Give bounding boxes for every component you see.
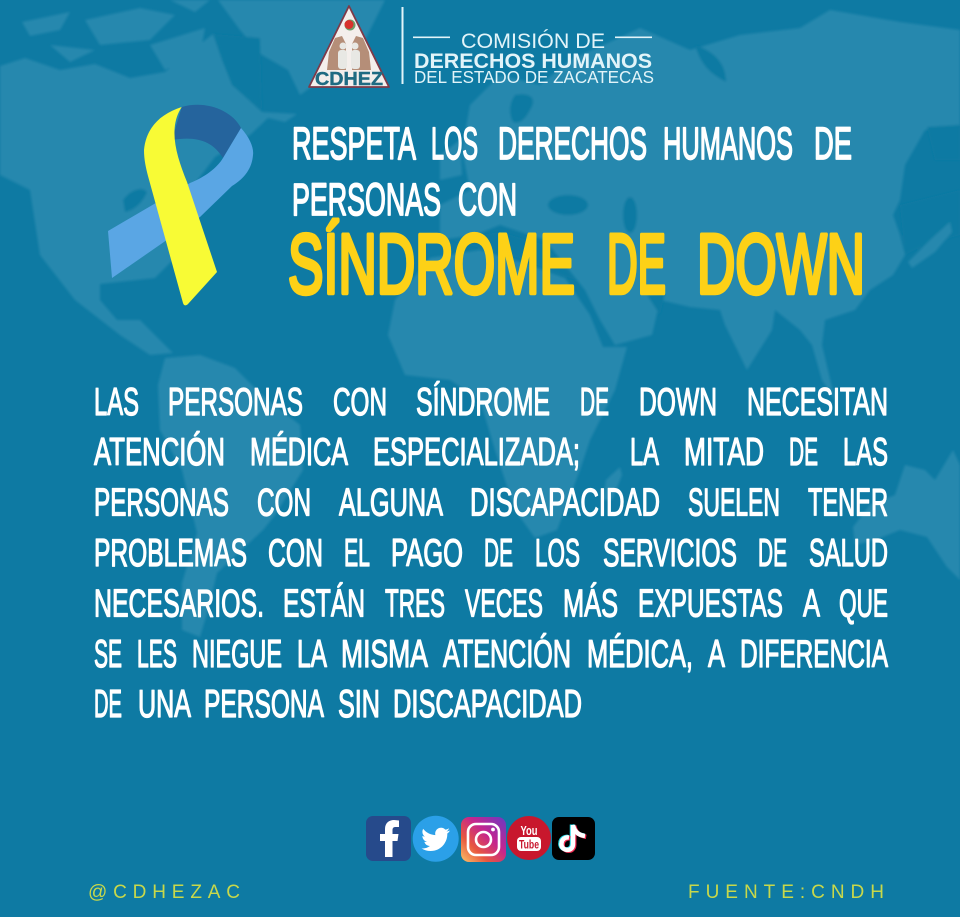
body text: NECESARIOS. — [94, 582, 264, 626]
heading line 1: DE — [814, 118, 852, 169]
body text: DE — [789, 431, 818, 474]
body text: DE — [94, 683, 122, 726]
body text: PERSONA — [204, 683, 324, 726]
body text: QUE — [839, 582, 888, 626]
body text: NECESITAN — [747, 381, 888, 424]
heading line 1: DERECHOS — [498, 118, 647, 169]
icon: instagram — [461, 817, 506, 862]
body text: MÉDICA — [250, 431, 348, 474]
social handle: @CDHEZAC — [88, 882, 240, 903]
heading line 2: CON — [458, 174, 517, 225]
body text: DE — [484, 532, 513, 575]
logo emblem: red and green circle — [344, 20, 356, 30]
body text: SÍNDROME — [416, 381, 550, 424]
body text: CON — [257, 482, 311, 524]
body text: SUELEN — [688, 482, 780, 524]
body text: LES — [137, 633, 177, 676]
body text: NIEGUE — [192, 633, 282, 676]
icon: youtube: You — [520, 823, 538, 838]
icon: youtube: Tube — [519, 840, 539, 852]
body text: MÉDICA, — [587, 633, 693, 676]
body text: MITAD — [684, 431, 764, 474]
body text: PROBLEMAS — [94, 532, 247, 575]
body text: SALUD — [809, 532, 888, 575]
heading highlight: SÍNDROME — [288, 217, 575, 311]
body text: LAS — [843, 431, 888, 474]
logo emblem: hands and figures — [327, 36, 371, 70]
body text: UNA — [138, 683, 191, 726]
body text: DISCAPACIDAD — [393, 683, 582, 726]
institution name — [413, 30, 654, 87]
body text: EL — [344, 532, 370, 575]
heading line 2: PERSONAS — [292, 174, 441, 225]
body text: CON — [268, 532, 323, 575]
body text: DE — [758, 532, 787, 575]
world map — [0, 0, 960, 637]
heading line 1: HUMANOS — [663, 118, 793, 169]
body text: EXPUESTAS — [638, 582, 783, 626]
body text: CON — [333, 381, 387, 424]
heading line 1: RESPETA — [292, 118, 416, 169]
body text: A — [708, 633, 725, 676]
icon: facebook — [366, 816, 411, 861]
body text: LOS — [535, 532, 580, 575]
social media icons — [366, 816, 595, 862]
logo: CDHEZ triangle — [309, 6, 389, 89]
body text: A — [803, 582, 820, 626]
body text: DISCAPACIDAD — [470, 482, 660, 524]
body text: DOWN — [639, 381, 717, 424]
body text: DE — [580, 381, 609, 424]
body text: ALGUNA — [339, 482, 443, 524]
body text: PERSONAS — [94, 482, 229, 524]
heading highlight: DOWN — [697, 217, 865, 311]
body text: MÁS — [563, 582, 618, 626]
institution name: DERECHOS HUMANOS — [414, 50, 652, 73]
body text: ESPECIALIZADA; — [373, 431, 580, 474]
icon: twitter — [413, 816, 459, 862]
institution name: DEL ESTADO DE ZACATECAS — [414, 67, 654, 87]
body text: PAGO — [391, 532, 463, 575]
body text: MISMA — [341, 633, 428, 676]
icon: youtube — [507, 816, 551, 860]
body text: SIN — [338, 683, 380, 726]
header divider — [402, 7, 404, 84]
source: FUENTE:CNDH — [688, 882, 884, 903]
body text: SERVICIOS — [603, 532, 737, 575]
body text: LAS — [94, 381, 139, 424]
body text: VECES — [465, 582, 543, 626]
icon: tiktok — [552, 817, 595, 860]
body text — [94, 381, 888, 726]
heading — [292, 118, 852, 225]
body text: LA — [630, 431, 659, 474]
body text: ATENCIÓN — [443, 633, 571, 676]
body text: SE — [94, 633, 122, 676]
body text: TENER — [808, 482, 888, 524]
body text: ESTÁN — [283, 582, 365, 626]
institution name: COMISIÓN DE — [461, 30, 605, 53]
body text: TRES — [385, 582, 445, 626]
logo text: CDHEZ — [315, 69, 383, 89]
body text: LA — [297, 633, 327, 676]
heading highlight: DE — [607, 217, 666, 311]
icon: awareness ribbon — [108, 105, 253, 305]
body text: ATENCIÓN — [94, 431, 225, 474]
heading line 1: LOS — [431, 118, 478, 169]
heading line 1 — [292, 118, 852, 169]
body text: PERSONAS — [168, 381, 303, 424]
